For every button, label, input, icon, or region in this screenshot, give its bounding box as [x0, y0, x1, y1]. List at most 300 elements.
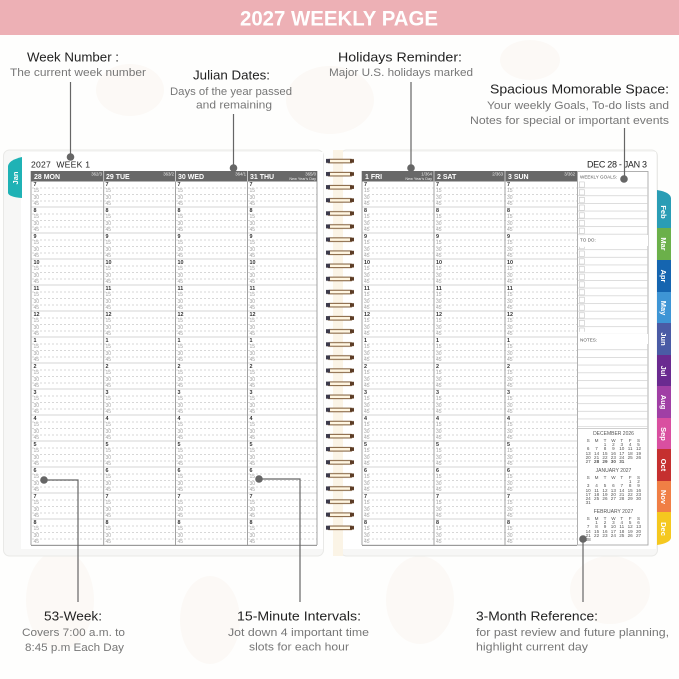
time labels: 1 FRI: 6: [364, 468, 367, 474]
calendar: February 2027: S: [587, 516, 590, 521]
time labels: 29 TUE: 9: [106, 234, 108, 240]
time labels: 28 MON: 45: [34, 305, 39, 311]
calendar: December 2026: 14: [594, 450, 599, 456]
time labels: 3 SUN: 15: [507, 240, 513, 246]
calendar: February 2027: 16: [602, 528, 608, 534]
time labels: 29 TUE: 30: [106, 324, 111, 330]
time labels: 28 MON: 30: [34, 532, 39, 538]
hourly grid: [31, 171, 577, 546]
time labels: 29 TUE: 15: [106, 500, 111, 506]
time labels: 28 MON: 30: [34, 350, 39, 356]
time labels: 31 THU: 15: [250, 214, 255, 220]
time labels: 3 SUN: 30: [507, 350, 513, 356]
time labels: 1 FRI: 30: [364, 428, 370, 434]
time labels: 28 MON: 45: [34, 487, 39, 493]
time labels: 2 SAT: 30: [436, 454, 442, 460]
time labels: 1 FRI: 30: [364, 506, 370, 512]
week heading: 2027 WEEK 1: [31, 160, 90, 170]
time labels: 30 WED: 45: [178, 461, 183, 467]
time labels: 2 SAT: 7: [436, 182, 439, 188]
calendar: January 2027: 18: [594, 492, 599, 497]
time labels: 3 SUN: 45: [507, 305, 513, 311]
time labels: 3 SUN: 15: [507, 422, 513, 428]
time labels: 31 THU: 30: [250, 428, 255, 434]
time labels: 30 WED: 30: [178, 428, 183, 434]
time labels: 3 SUN: 30: [507, 506, 513, 512]
calendar: January 2027: 23: [636, 492, 641, 497]
time labels: 3 SUN: 15: [507, 526, 513, 532]
time labels: 30 WED: 30: [178, 480, 183, 486]
time labels: 28 MON: 15: [34, 214, 39, 220]
time labels: 28 MON: [34, 182, 40, 545]
calendar: January 2027: M: [595, 475, 598, 480]
time labels: 1 FRI: 7: [364, 182, 367, 188]
right sidebar: WEEKLY GOALS:: [580, 174, 617, 180]
time labels: 31 THU: 45: [250, 201, 255, 207]
time labels: 31 THU: 45: [250, 461, 255, 467]
time labels: 2 SAT: 2: [436, 364, 439, 370]
time labels: 29 TUE: 30: [106, 298, 111, 304]
time labels: 30 WED: 45: [178, 227, 183, 233]
time labels: 31 THU: 45: [250, 435, 255, 441]
right sidebar: TO DO:: [580, 238, 596, 242]
time labels: 2 SAT: 7: [436, 494, 439, 500]
calendar: January 2027: 11: [594, 488, 599, 492]
calendar: December 2026: 11: [628, 446, 633, 451]
time labels: 30 WED: 30: [178, 272, 183, 278]
calendar: December 2026: 4: [629, 442, 631, 447]
calendar: February 2027: 21: [586, 533, 591, 538]
callout: Spacious Momorable Space: Your weekly Goals, To-do lists and: [487, 100, 669, 112]
day headers: 1 FRI: [365, 174, 382, 181]
time labels: 31 THU: 45: [250, 227, 255, 233]
calendar: December 2026: 3: [620, 442, 623, 447]
calendar: January 2027: 9: [637, 483, 640, 488]
time labels: 1 FRI: 2: [364, 364, 367, 370]
time labels: 1 FRI: 45: [364, 357, 370, 363]
time labels: 29 TUE: 30: [106, 246, 111, 252]
time labels: 28 MON: 30: [34, 324, 39, 330]
time labels: 2 SAT: 45: [436, 539, 442, 545]
time labels: 29 TUE: 6: [106, 468, 108, 474]
time labels: 1 FRI: 15: [364, 344, 370, 350]
time labels: 28 MON: 45: [34, 227, 39, 233]
time labels: 29 TUE: 45: [106, 409, 111, 415]
callout: 53-Week: Covers 7:00 a.m. to: [22, 627, 125, 639]
time labels: 1 FRI: 3: [364, 390, 367, 396]
calendar: January 2027: T: [604, 475, 606, 480]
time labels: 2 SAT: 45: [436, 201, 442, 207]
time labels: 3 SUN: 12: [507, 312, 513, 318]
time labels: 31 THU: 45: [250, 331, 255, 337]
time labels: 29 TUE: 7: [106, 182, 108, 188]
time labels: 31 THU: 15: [250, 370, 255, 376]
time labels: 30 WED: 45: [178, 253, 183, 259]
time labels: 3 SUN: 1: [507, 338, 510, 344]
time labels: 2 SAT: 30: [436, 324, 442, 330]
time labels: 2 SAT: 30: [436, 402, 442, 408]
time labels: 3 SUN: 45: [507, 513, 513, 519]
time labels: 30 WED: 30: [178, 220, 183, 226]
time labels: 28 MON: 6: [34, 468, 36, 474]
time labels: 30 WED: 15: [178, 370, 183, 376]
time labels: 1 FRI: 4: [364, 416, 367, 422]
time labels: 2 SAT: 45: [436, 279, 442, 285]
time labels: 2 SAT: 30: [436, 350, 442, 356]
month tabs: Feb: [659, 205, 668, 219]
time labels: 2 SAT: 45: [436, 305, 442, 311]
time labels: 1 FRI: 15: [364, 292, 370, 298]
time labels: 30 WED: 30: [178, 350, 183, 356]
callout: 53-Week: 53-Week:: [44, 608, 102, 624]
calendar: December 2026: 25: [628, 455, 633, 460]
calendar: January 2027: 27: [611, 496, 616, 501]
time labels: 30 WED: 45: [178, 357, 183, 363]
time labels: 1 FRI: 1: [364, 338, 367, 344]
time labels: 2 SAT: 30: [436, 298, 442, 304]
calendar: January 2027: 25: [594, 496, 599, 501]
time labels: 3 SUN: 15: [507, 448, 513, 454]
day headers: 28 MON: [34, 174, 60, 181]
calendar: February 2027: 2: [604, 520, 606, 525]
time labels: 30 WED: 30: [178, 402, 183, 408]
calendar: February 2027: 26: [628, 533, 633, 538]
time labels: 2 SAT: 45: [436, 435, 442, 441]
month tabs: Oct: [659, 459, 668, 472]
time labels: 29 TUE: 15: [106, 188, 111, 194]
callout: Week Number: [10, 50, 146, 161]
time labels: 28 MON: 15: [34, 448, 39, 454]
time labels: 28 MON: 9: [34, 234, 36, 240]
time labels: 3 SUN: 30: [507, 194, 513, 200]
time labels: 30 WED: 15: [178, 292, 183, 298]
time labels: 28 MON: 15: [34, 526, 39, 532]
time labels: 1 FRI: 45: [364, 487, 370, 493]
time labels: 3 SUN: 45: [507, 409, 513, 415]
time labels: 31 THU: 15: [250, 448, 255, 454]
time labels: 31 THU: 8: [250, 520, 252, 526]
time labels: 28 MON: 8: [34, 208, 36, 214]
calendar: January 2027: 20: [611, 492, 616, 497]
calendar: January 2027: 13: [611, 488, 616, 492]
calendar: February 2027: 28: [586, 537, 591, 542]
time labels: 3 SUN: 15: [507, 214, 513, 220]
calendar: January 2027: 3: [587, 483, 589, 488]
month tabs: [657, 190, 671, 545]
right sidebar: [578, 172, 648, 545]
calendar: January 2027: S: [587, 475, 590, 480]
month tabs: Jul: [659, 366, 668, 376]
time labels: 1 FRI: 30: [364, 402, 370, 408]
callout: Holidays Reminder: [329, 50, 473, 172]
time labels: 30 WED: 30: [178, 246, 183, 252]
time labels: 28 MON: 30: [34, 246, 39, 252]
time labels: 31 THU: 15: [250, 474, 255, 480]
time labels: 29 TUE: 45: [106, 383, 111, 389]
time labels: 1 FRI: 45: [364, 513, 370, 519]
time labels: 31 THU: 30: [250, 480, 255, 486]
calendar: December 2026: 15: [602, 450, 608, 456]
calendar: February 2027: F: [629, 516, 632, 521]
calendar: December 2026: [586, 430, 641, 464]
time labels: 2 SAT: 12: [436, 312, 442, 318]
calendar: January 2027: 14: [619, 488, 624, 492]
time labels: 31 THU: 15: [250, 422, 255, 428]
time labels: 3 SUN: 45: [507, 331, 513, 337]
time labels: 3 SUN: 45: [507, 435, 513, 441]
time labels: 28 MON: 45: [34, 331, 39, 337]
time labels: 3 SUN: 30: [507, 480, 513, 486]
time labels: 2 SAT: 15: [436, 422, 442, 428]
time labels: 1 FRI: 45: [364, 461, 370, 467]
callout: Spacious Momorable Space: Spacious Momorable Space:: [490, 82, 669, 96]
time labels: 1 FRI: 30: [364, 220, 370, 226]
calendar: January 2027: 6: [612, 483, 615, 488]
time labels: 31 THU: 45: [250, 357, 255, 363]
calendar: January 2027: 24: [586, 496, 591, 501]
calendar: December 2026: 2: [612, 442, 615, 447]
time labels: 2 SAT: [436, 182, 442, 545]
time labels: 29 TUE: 15: [106, 240, 111, 246]
time labels: 31 THU: 8: [250, 208, 252, 214]
time labels: 2 SAT: 3: [436, 390, 439, 396]
calendar: January 2027: JANUARY 2027: [596, 468, 631, 474]
time labels: 1 FRI: 15: [364, 370, 370, 376]
callout: Spacious Momorable Space: [470, 82, 670, 183]
time labels: 30 WED: 6: [178, 468, 180, 474]
time labels: 29 TUE: 30: [106, 506, 111, 512]
time labels: 28 MON: 15: [34, 422, 39, 428]
tab: January: Jan: [11, 171, 20, 184]
time labels: 3 SUN: 2: [507, 364, 510, 370]
month tabs: Dec: [659, 522, 668, 536]
day headers: 2 SAT: [437, 174, 457, 181]
time labels: 30 WED: 30: [178, 194, 183, 200]
time labels: 2 SAT: 15: [436, 214, 442, 220]
time labels: 28 MON: 5: [34, 442, 36, 448]
time labels: 30 WED: 15: [178, 240, 183, 246]
time labels: 28 MON: 15: [34, 474, 39, 480]
callout: 3-Month Reference: highlight current day: [476, 642, 589, 654]
time labels: 3 SUN: 30: [507, 220, 513, 226]
time labels: 28 MON: 30: [34, 298, 39, 304]
time labels: 28 MON: 15: [34, 396, 39, 402]
time labels: 1 FRI: 30: [364, 324, 370, 330]
calendar: January 2027: 30: [636, 496, 641, 501]
time labels: 30 WED: 15: [178, 500, 183, 506]
time labels: 31 THU: 30: [250, 350, 255, 356]
time labels: 28 MON: 45: [34, 383, 39, 389]
calendar: December 2026: 23: [611, 455, 616, 460]
calendar: December 2026: 20: [586, 455, 591, 460]
time labels: 30 WED: 15: [178, 318, 183, 324]
callout: Julian Dates: and remaining: [196, 100, 272, 112]
time labels: 2 SAT: 45: [436, 461, 442, 467]
time labels: 2 SAT: 15: [436, 474, 442, 480]
time labels: 31 THU: 45: [250, 279, 255, 285]
calendar: January 2027: 19: [602, 492, 608, 497]
time labels: 30 WED: 45: [178, 279, 183, 285]
time labels: 28 MON: 4: [34, 416, 36, 422]
day headers: 31 THU: [250, 174, 274, 181]
time labels: 2 SAT: 15: [436, 526, 442, 532]
time labels: 3 SUN: 7: [507, 182, 510, 188]
time labels: 30 WED: 30: [178, 506, 183, 512]
time labels: 30 WED: 45: [178, 513, 183, 519]
time labels: 1 FRI: [364, 182, 370, 545]
callout: 3-Month Reference: 3-Month Reference:: [476, 608, 598, 624]
calendar: December 2026: T: [604, 438, 606, 443]
calendar: January 2027: 8: [629, 483, 631, 488]
time labels: 2 SAT: 15: [436, 266, 442, 272]
time labels: 29 TUE: 4: [106, 416, 108, 422]
callout: Holidays Reminder: Major U.S. holidays marked: [329, 67, 473, 79]
time labels: 31 THU: [250, 182, 256, 545]
day headers: New Year's Day: [405, 177, 432, 181]
day headers: 364/1: [235, 172, 247, 176]
callout: 3-Month Reference: for past review and future planning,: [476, 627, 669, 639]
calendar: February 2027: S: [637, 516, 640, 521]
time labels: 31 THU: 30: [250, 298, 255, 304]
calendar: December 2026: M: [595, 438, 598, 443]
time labels: 28 MON: 30: [34, 402, 39, 408]
calendar: December 2026: 21: [594, 455, 599, 460]
time labels: 28 MON: 12: [34, 312, 40, 318]
time labels: 2 SAT: 30: [436, 220, 442, 226]
time labels: 2 SAT: 5: [436, 442, 439, 448]
time labels: 29 TUE: 10: [106, 260, 112, 266]
time labels: 31 THU: 15: [250, 240, 255, 246]
calendar: December 2026: 22: [602, 455, 608, 460]
calendar: December 2026: DECEMBER 2026: [593, 430, 634, 436]
time labels: 31 THU: 45: [250, 487, 255, 493]
time labels: 29 TUE: 45: [106, 279, 111, 285]
time labels: 29 TUE: 30: [106, 194, 111, 200]
planner left cover: [4, 150, 324, 556]
calendar: December 2026: 26: [636, 455, 641, 460]
day headers: 1/364: [421, 172, 433, 176]
month tabs: Nov: [659, 490, 668, 505]
calendar: February 2027: 20: [636, 528, 641, 534]
time labels: 31 THU: 30: [250, 376, 255, 382]
spiral centre strip: [333, 150, 343, 556]
time labels: 2 SAT: 10: [436, 260, 442, 266]
time labels: 30 WED: 15: [178, 448, 183, 454]
calendar: December 2026: 28: [594, 459, 599, 464]
time labels: 29 TUE: 30: [106, 402, 111, 408]
time labels: 29 TUE: 15: [106, 266, 111, 272]
time labels: 1 FRI: 45: [364, 305, 370, 311]
time labels: 3 SUN: 3: [507, 390, 510, 396]
time labels: 2 SAT: 45: [436, 383, 442, 389]
time labels: 29 TUE: 3: [106, 390, 108, 396]
calendar: December 2026: S: [637, 438, 640, 443]
time labels: 29 TUE: 45: [106, 357, 111, 363]
time labels: 3 SUN: 7: [507, 494, 510, 500]
calendar: December 2026: S: [587, 438, 590, 443]
time labels: 3 SUN: 15: [507, 500, 513, 506]
time labels: 31 THU: 30: [250, 324, 255, 330]
time labels: 29 TUE: 45: [106, 227, 111, 233]
time labels: 3 SUN: 30: [507, 298, 513, 304]
calendar: December 2026: 18: [628, 450, 633, 456]
time labels: 29 TUE: 5: [106, 442, 108, 448]
time labels: 3 SUN: 30: [507, 532, 513, 538]
time labels: 3 SUN: 45: [507, 227, 513, 233]
time labels: 28 MON: 7: [34, 494, 36, 500]
time labels: 31 THU: 1: [250, 338, 252, 344]
time labels: 1 FRI: 12: [364, 312, 370, 318]
callout: 15-Minute Intervals: 15-Minute Intervals:: [237, 608, 361, 624]
time labels: 1 FRI: 30: [364, 532, 370, 538]
time labels: 1 FRI: 15: [364, 500, 370, 506]
time labels: 28 MON: 3: [34, 390, 36, 396]
time labels: 2 SAT: 15: [436, 396, 442, 402]
calendar: January 2027: 21: [619, 492, 624, 497]
time labels: 3 SUN: 6: [507, 468, 510, 474]
day headers: 2/363: [492, 172, 504, 176]
time labels: 31 THU: 45: [250, 253, 255, 259]
time labels: 31 THU: 15: [250, 318, 255, 324]
callout: 53-Week: 8:45 p.m Each Day: [25, 642, 125, 654]
time labels: 30 WED: 15: [178, 344, 183, 350]
time labels: 31 THU: 15: [250, 188, 255, 194]
time labels: 30 WED: 15: [178, 526, 183, 532]
time labels: 31 THU: 30: [250, 532, 255, 538]
time labels: 1 FRI: 45: [364, 279, 370, 285]
time labels: 2 SAT: 15: [436, 448, 442, 454]
callout: Holidays Reminder: Holidays Reminder:: [338, 50, 462, 64]
time labels: 31 THU: 30: [250, 246, 255, 252]
time labels: 1 FRI: 30: [364, 376, 370, 382]
calendar: February 2027: 14: [586, 528, 591, 534]
time labels: 2 SAT: 45: [436, 357, 442, 363]
time labels: 28 MON: 30: [34, 428, 39, 434]
time labels: 1 FRI: 45: [364, 539, 370, 545]
calendar: January 2027: 12: [602, 488, 608, 492]
time labels: 29 TUE: 30: [106, 428, 111, 434]
time labels: 29 TUE: 45: [106, 539, 111, 545]
time labels: 31 THU: 30: [250, 454, 255, 460]
time labels: 30 WED: 15: [178, 422, 183, 428]
time labels: 3 SUN: 45: [507, 201, 513, 207]
time labels: 1 FRI: 8: [364, 208, 367, 214]
time labels: 28 MON: 45: [34, 409, 39, 415]
calendar: February 2027: 19: [628, 528, 633, 534]
time labels: 30 WED: 45: [178, 305, 183, 311]
time labels: 3 SUN: 8: [507, 208, 510, 214]
time labels: 28 MON: 15: [34, 188, 39, 194]
calendar: February 2027: 18: [619, 528, 624, 534]
title banner: 2027 WEEKLY PAGE: [240, 8, 438, 30]
time labels: 3 SUN: 30: [507, 454, 513, 460]
time labels: 31 THU: 2: [250, 364, 252, 370]
time labels: 28 MON: 30: [34, 272, 39, 278]
time labels: 2 SAT: 30: [436, 428, 442, 434]
time labels: 30 WED: 15: [178, 474, 183, 480]
spiral binding: [323, 157, 357, 537]
time labels: 31 THU: 45: [250, 305, 255, 311]
time labels: 28 MON: 45: [34, 461, 39, 467]
time labels: 29 TUE: 8: [106, 520, 108, 526]
calendar: February 2027: [586, 508, 641, 542]
time labels: 3 SUN: 30: [507, 428, 513, 434]
time labels: 31 THU: 15: [250, 266, 255, 272]
time labels: 29 TUE: 45: [106, 305, 111, 311]
time labels: 2 SAT: 9: [436, 234, 439, 240]
time labels: 2 SAT: 30: [436, 272, 442, 278]
calendar: February 2027: 13: [636, 524, 641, 529]
